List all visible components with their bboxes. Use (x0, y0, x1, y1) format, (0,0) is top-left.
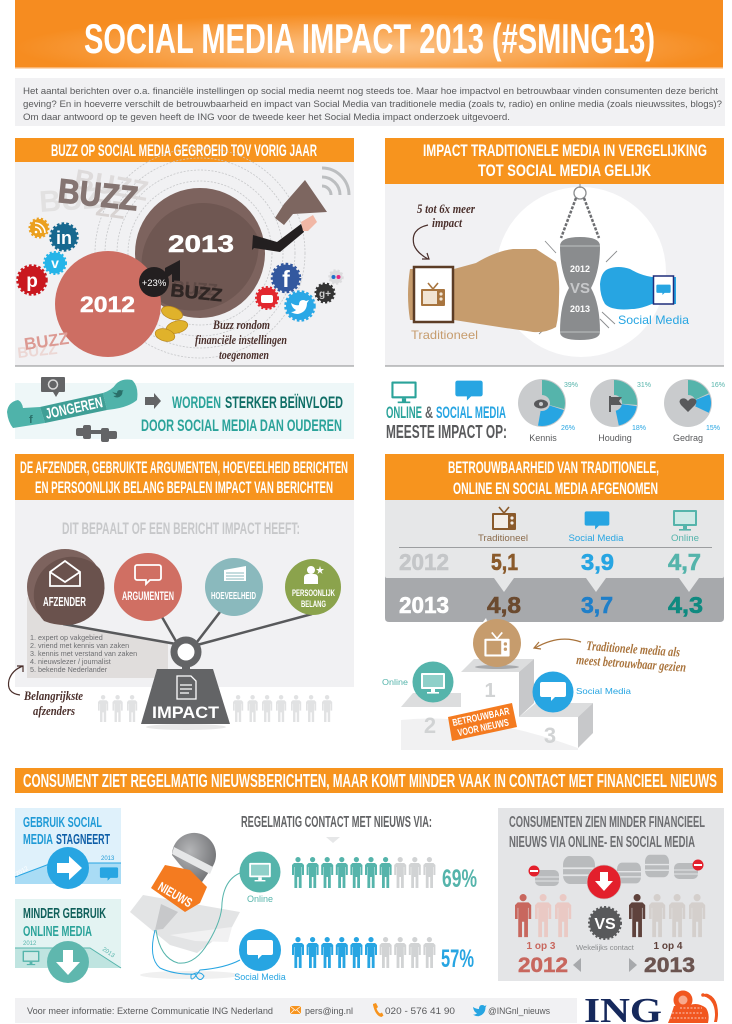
podium (382, 618, 687, 750)
faded buzz bottom left: BUZZ (23, 329, 70, 354)
subheading: regelmatig contact: REGELMATIG CONTACT MET NIEUWS VIA: (241, 814, 432, 831)
handwritten note: traditionele media (576, 638, 687, 675)
small buzz in circle: BUZZ (170, 280, 223, 305)
values 2012: 3,9 (581, 549, 614, 575)
values 2012: 5,1 (491, 549, 518, 575)
box: minder gebruik online media: ONLINE MEDIA (23, 924, 92, 940)
handwritten note: buzz: Buzz rondom (212, 317, 270, 332)
donut: gedrag: Gedrag (673, 433, 703, 443)
box: gebruik social media: 2012 (15, 866, 30, 878)
donut: kennis: Kennis (529, 433, 557, 443)
badge: vs (590, 908, 620, 938)
jongeren text: DOOR SOCIAL MEDIA DAN OUDEREN (141, 416, 342, 435)
icon: phone (373, 1003, 384, 1017)
badge: vs: VS (594, 916, 616, 933)
circle: argumenten: ARGUMENTEN (122, 589, 174, 603)
minus badges (528, 860, 704, 876)
values 2012: 2012 (399, 549, 449, 575)
growth badge +23%: +23% (142, 278, 167, 289)
senders list (27, 597, 168, 678)
social badges (18, 219, 342, 320)
jongeren text: WORDEN (172, 393, 221, 412)
handwritten note: belangrijkste afzenders: Belangrijkste (23, 688, 83, 703)
heading: online and social media: SOCIAL MEDIA (436, 403, 506, 422)
circle: persoonlijk belang: BELANG (301, 599, 326, 610)
jongeren text (141, 393, 343, 435)
senders list: 4. nieuwslezer / journalist (30, 657, 111, 666)
heading: online and social media: MEESTE IMPACT OP: (386, 422, 507, 442)
heading: online and social media: ONLINE (386, 403, 422, 422)
box: minder gebruik online media (15, 899, 121, 983)
icon: tv circle (473, 618, 521, 669)
icon: bubble with gear (41, 377, 65, 397)
icon: arrow circle right (47, 847, 89, 889)
cable: social (152, 930, 240, 980)
values 2013 (399, 592, 703, 618)
box: gebruik social media: 2013 (101, 856, 115, 862)
handwritten note: traditionele media: Traditionele media als (586, 638, 681, 660)
circle: hoeveelheid: HOEVEELHEID (211, 590, 256, 602)
footer: Voor meer informatie: Externe Communicatie ING Nederland (27, 1006, 273, 1016)
circle: persoonlijk belang: PERSOONLIJK (292, 588, 335, 599)
heading: afzender: DE AFZENDER, GEBRUIKTE ARGUMENTEN, HOEVEELHEID BERICHTEN (20, 458, 348, 477)
podium: 3 (544, 723, 556, 748)
row: online 69%: 69% (442, 865, 477, 893)
row 2013 background (385, 576, 724, 622)
circle 2012: 2012 (80, 292, 135, 317)
icon: red down arrow (587, 865, 621, 899)
handwritten note: buzz: financiële instellingen (195, 332, 287, 347)
buzz word cloud: BUZZ (72, 163, 151, 207)
row: online 69%: Online (247, 894, 273, 904)
handwritten note: belangrijkste afzenders (23, 688, 83, 718)
captions: Wekelijks contact (576, 943, 635, 952)
circle: afzender: AFZENDER (43, 594, 86, 609)
handwritten note: impact: impact (432, 215, 462, 230)
podium: 1 (484, 680, 496, 702)
footer (15, 998, 577, 1023)
box: gebruik social media: MEDIA (23, 832, 53, 848)
icon: coins (154, 304, 189, 343)
icon: online circle small (240, 852, 280, 892)
values 2013: 2013 (399, 592, 449, 618)
icon: speech bubble (455, 381, 483, 401)
panel: betrouwbaarheid (385, 454, 724, 622)
years comparison (518, 954, 695, 977)
pictogram: online people (292, 857, 435, 888)
sticker: betrouwbaar voor nieuws: VOOR NIEUWS (457, 718, 510, 739)
donut: gedrag: 16% (711, 382, 725, 389)
panel: afzender (15, 454, 354, 687)
heading: online and social media (386, 403, 507, 442)
label: traditioneel: Traditioneel (411, 328, 478, 342)
logo: ING (584, 990, 718, 1024)
donut: kennis: 39% (564, 382, 578, 389)
icon: social circle (532, 672, 574, 712)
values 2012: 4,7 (668, 549, 701, 575)
donut: houding: Houding (598, 433, 632, 443)
subheading: regelmatig contact (241, 814, 432, 843)
icon: punching bag (539, 184, 617, 340)
faded buzz bottom left (17, 329, 70, 362)
values 2012 (399, 549, 701, 575)
podium: 2 (424, 713, 436, 738)
sticker: betrouwbaar voor nieuws (448, 703, 517, 741)
handwritten note: traditionele media: meest betrouwbaar gezien (576, 652, 687, 675)
box: gebruik social media (15, 808, 121, 889)
buzz word cloud: BUZZ (56, 172, 140, 218)
icon: megaphone with arm (252, 168, 349, 252)
panel: buzz op social media (15, 138, 354, 366)
icon: microphone with papers (130, 833, 240, 979)
panel: impact traditionele media (385, 138, 724, 366)
handwritten note: buzz (195, 317, 287, 362)
box: gebruik social media: STAGNEERT (56, 832, 110, 848)
donut: houding: 31% (637, 382, 651, 389)
block: online en social media meeste impact (386, 379, 725, 443)
icon: blue boxing glove (600, 267, 676, 309)
icon: impact weight: IMPACT (152, 703, 220, 722)
icon: impact weight (141, 640, 230, 730)
arrow: curved up (8, 666, 23, 695)
values 2013: 4,3 (668, 592, 703, 618)
heading: afzender: EN PERSOONLIJK BELANG BEPALEN IMPACT VAN BERICHTEN (35, 478, 333, 497)
circle 2012 (55, 251, 161, 357)
row: online 69% (240, 852, 477, 904)
icon: social circle small (239, 929, 281, 971)
heading: buzz (15, 138, 354, 162)
sticker: betrouwbaar voor nieuws: BETROUWBAAR (452, 706, 511, 729)
row: social media 57%: 57% (441, 945, 474, 973)
table column icons: Online (671, 533, 699, 544)
intro text block (15, 78, 725, 126)
coin stacks (535, 855, 698, 886)
values 2013: 3,7 (581, 592, 613, 618)
icon: punching bag: 2012 (570, 264, 590, 274)
years comparison: 2012 (518, 954, 568, 977)
captions: 1 op 4 (654, 941, 683, 952)
box: minder gebruik online media: 2013 (101, 947, 116, 960)
senders list: 2. vriend met kennis van zaken (30, 641, 129, 650)
handwritten note: impact: 5 tot 6x meer (417, 201, 476, 216)
circle 2013: 2013 (168, 231, 234, 258)
small buzz in circle: BUZZ (172, 277, 218, 300)
footer: pers@ing.nl (305, 1006, 353, 1016)
table column icons: Social Media (568, 533, 624, 544)
title banner (15, 0, 723, 68)
icon: punching bag: VS (570, 280, 590, 297)
heading: online and social media: & (425, 403, 433, 422)
panel: jongeren (7, 377, 354, 442)
growth badge +23% (139, 260, 180, 297)
icon: orange lion (668, 990, 718, 1023)
handwritten note: impact (417, 201, 476, 230)
donut: houding (590, 379, 651, 443)
box: minder gebruik online media: 2012 (23, 941, 37, 947)
jongeren text: STERKER BEÏNVLOED (225, 393, 343, 412)
label: social media: Social Media (618, 313, 689, 327)
donut: gedrag: 15% (706, 425, 720, 432)
values 2013: 4,8 (487, 592, 521, 618)
box: gebruik social media: GEBRUIK SOCIAL (23, 815, 102, 831)
icon: brown boxing glove (408, 249, 559, 332)
handwritten note: buzz: toegenomen (219, 347, 269, 362)
footer: 020 - 576 41 90 (385, 1006, 455, 1016)
social badges: g+ (319, 289, 331, 300)
icon: monitor (391, 382, 417, 403)
row: social media 57%: Social Media (234, 972, 286, 982)
people 2013 (629, 894, 705, 937)
connector lines (63, 612, 312, 645)
senders list: 1. expert op vakgebied (30, 633, 103, 642)
row: social media 57% (234, 929, 474, 982)
box: minder gebruik online media: MINDER GEBRUIK (23, 906, 106, 922)
arrow (145, 393, 161, 409)
heading: betrouwbaarheid (385, 454, 724, 500)
podium labels: Social Media (576, 686, 631, 696)
circle: hoeveelheid (205, 558, 263, 616)
cable: online (156, 873, 240, 963)
captions (527, 941, 683, 952)
circle 2013 (135, 188, 265, 318)
icon: muscle banner: JONGEREN (44, 394, 104, 423)
icon: muscle banner (7, 380, 137, 428)
panel: financieel nieuws (498, 808, 724, 981)
donut: kennis: 26% (561, 425, 575, 432)
icon: mail (290, 1006, 301, 1014)
icon: dumbbell (76, 425, 117, 442)
heading: impact (385, 138, 724, 184)
circle: argumenten (114, 553, 182, 621)
footer: @INGnl_nieuws (488, 1006, 550, 1016)
buzz word cloud: BUZZ (38, 180, 120, 219)
heading: financieel (509, 814, 705, 851)
dashed rings (95, 148, 305, 358)
table column icons (478, 507, 699, 544)
heading: buzz: BUZZ OP SOCIAL MEDIA GEGROEID TOV VORIG JAAR (51, 141, 317, 160)
donut: kennis (518, 379, 578, 443)
pictogram: social people (292, 937, 435, 968)
intro text block: Om daar antwoord op te geven heeft de ING voor de tweede keer het Social Media impact onderzoek uitgevoerd. (23, 112, 510, 123)
icon: microphone with papers: NIEUWS (155, 879, 195, 910)
social badges: p (26, 271, 38, 292)
icon: muscle banner: f (29, 414, 33, 426)
buzz word cloud: ZZ (94, 194, 127, 225)
heading: impact: TOT SOCIAL MEDIA GELIJK (478, 161, 652, 180)
donut: houding: 18% (632, 425, 646, 432)
circle: persoonlijk belang (285, 559, 341, 615)
intro text block: geving? En in hoeverre verschilt de betrouwbaarheid en impact van Social Media van traditionele media (zoals tv, radio) en online media (zoals nieuwssites, blogs)? (23, 99, 722, 110)
handwritten note: belangrijkste afzenders: afzenders (33, 703, 75, 718)
table column icons: Traditioneel (478, 533, 528, 544)
intro text block: Het aantal berichten over o.a. financiële instellingen op social media neemt nog steeds toe. Maar hoe impactvol en betrouwbaar vinden consumenten deze bericht (23, 86, 718, 97)
faded buzz bottom left: BUZZ (17, 341, 58, 362)
years comparison: 2013 (644, 954, 695, 977)
icon: arrow circle down (47, 941, 89, 983)
icon: online circle (412, 662, 454, 702)
senders list: 3. kennis met verstand van zaken (30, 649, 137, 658)
buzz word cloud (38, 163, 151, 225)
icon: punching bag: 2013 (570, 304, 590, 314)
arrow: to tv (534, 639, 581, 649)
podium labels (382, 677, 631, 696)
icon: twitter (473, 1005, 486, 1016)
crowd: grey people (98, 695, 332, 722)
social badges: in (56, 228, 72, 248)
social badges: f (282, 266, 290, 292)
circle: afzender (27, 549, 105, 625)
senders list: 5. bekende Nederlander (30, 665, 108, 674)
row 2012 background (385, 500, 724, 592)
subheading: DIT BEPAALT OF EEN BERICHT IMPACT HEEFT: (62, 519, 300, 538)
captions: 1 op 3 (527, 941, 556, 952)
donut: gedrag (664, 379, 725, 443)
heading: afzender (15, 454, 354, 500)
podium labels: Online (382, 677, 408, 687)
people 2012 (515, 894, 571, 937)
social badges: v (51, 255, 59, 271)
arrow: curved (413, 225, 429, 259)
